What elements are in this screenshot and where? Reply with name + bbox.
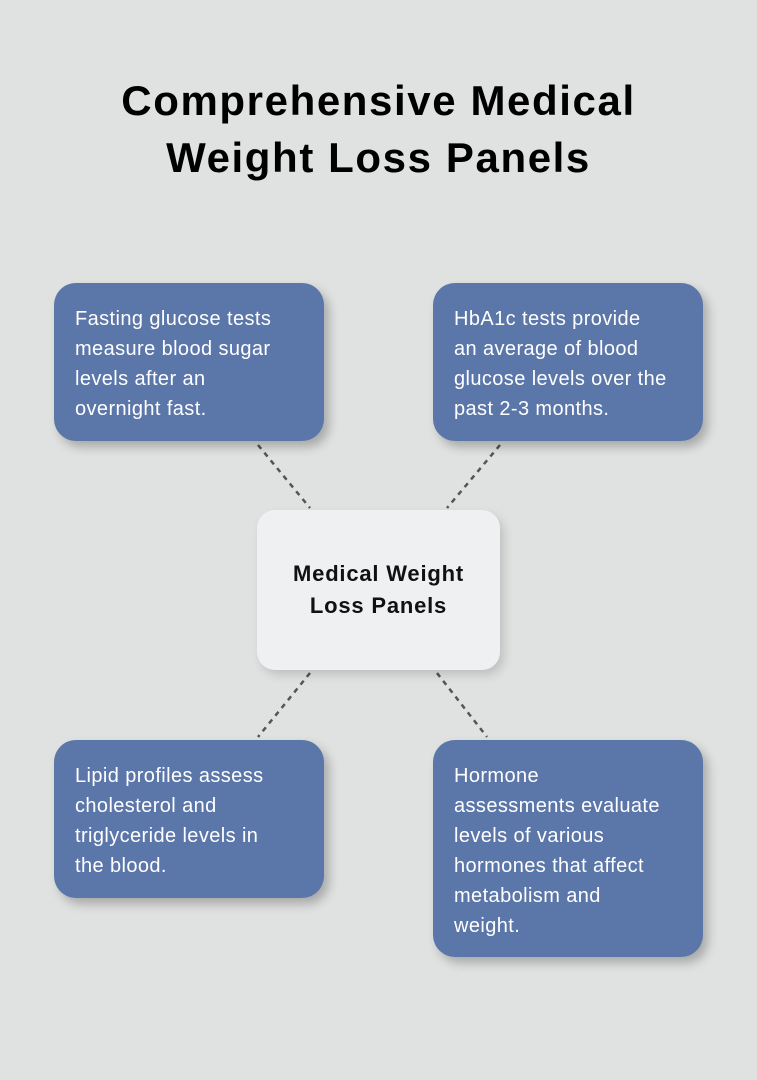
panel: hormone assessments: weight.	[454, 915, 520, 937]
panel: hormone assessments: Hormone	[454, 765, 539, 787]
panel: hormone assessments: metabolism and	[454, 885, 601, 907]
center node: Medical Weight	[293, 561, 464, 586]
panel: HbA1c: HbA1c tests provide	[454, 308, 641, 330]
panel: fasting glucose: levels after an	[75, 368, 206, 390]
title	[121, 77, 636, 181]
panel: HbA1c: past 2-3 months.	[454, 398, 609, 420]
panel: hormone assessments: hormones that affect	[454, 855, 644, 877]
panel: hormone assessments: assessments evaluate	[454, 795, 660, 817]
panel: fasting glucose: overnight fast.	[75, 398, 207, 420]
panel: fasting glucose: Fasting glucose tests	[75, 308, 271, 330]
panel: lipid profiles: cholesterol and	[75, 795, 217, 817]
panel: fasting glucose	[54, 283, 324, 441]
panel: lipid profiles	[54, 740, 324, 898]
panel: lipid profiles: Lipid profiles assess	[75, 765, 264, 787]
title: Comprehensive Medical	[121, 77, 636, 124]
panel: fasting glucose: measure blood sugar	[75, 338, 270, 360]
center node	[257, 510, 500, 670]
panel: hormone assessments	[433, 740, 703, 957]
panel: lipid profiles: triglyceride levels in	[75, 825, 258, 847]
title: Weight Loss Panels	[166, 134, 591, 181]
panel: HbA1c: an average of blood	[454, 338, 638, 360]
panel: HbA1c: glucose levels over the	[454, 368, 667, 390]
panel: hormone assessments: levels of various	[454, 825, 604, 847]
panel: HbA1c	[433, 283, 703, 441]
center node: Loss Panels	[310, 593, 447, 618]
panel: lipid profiles: the blood.	[75, 855, 167, 877]
